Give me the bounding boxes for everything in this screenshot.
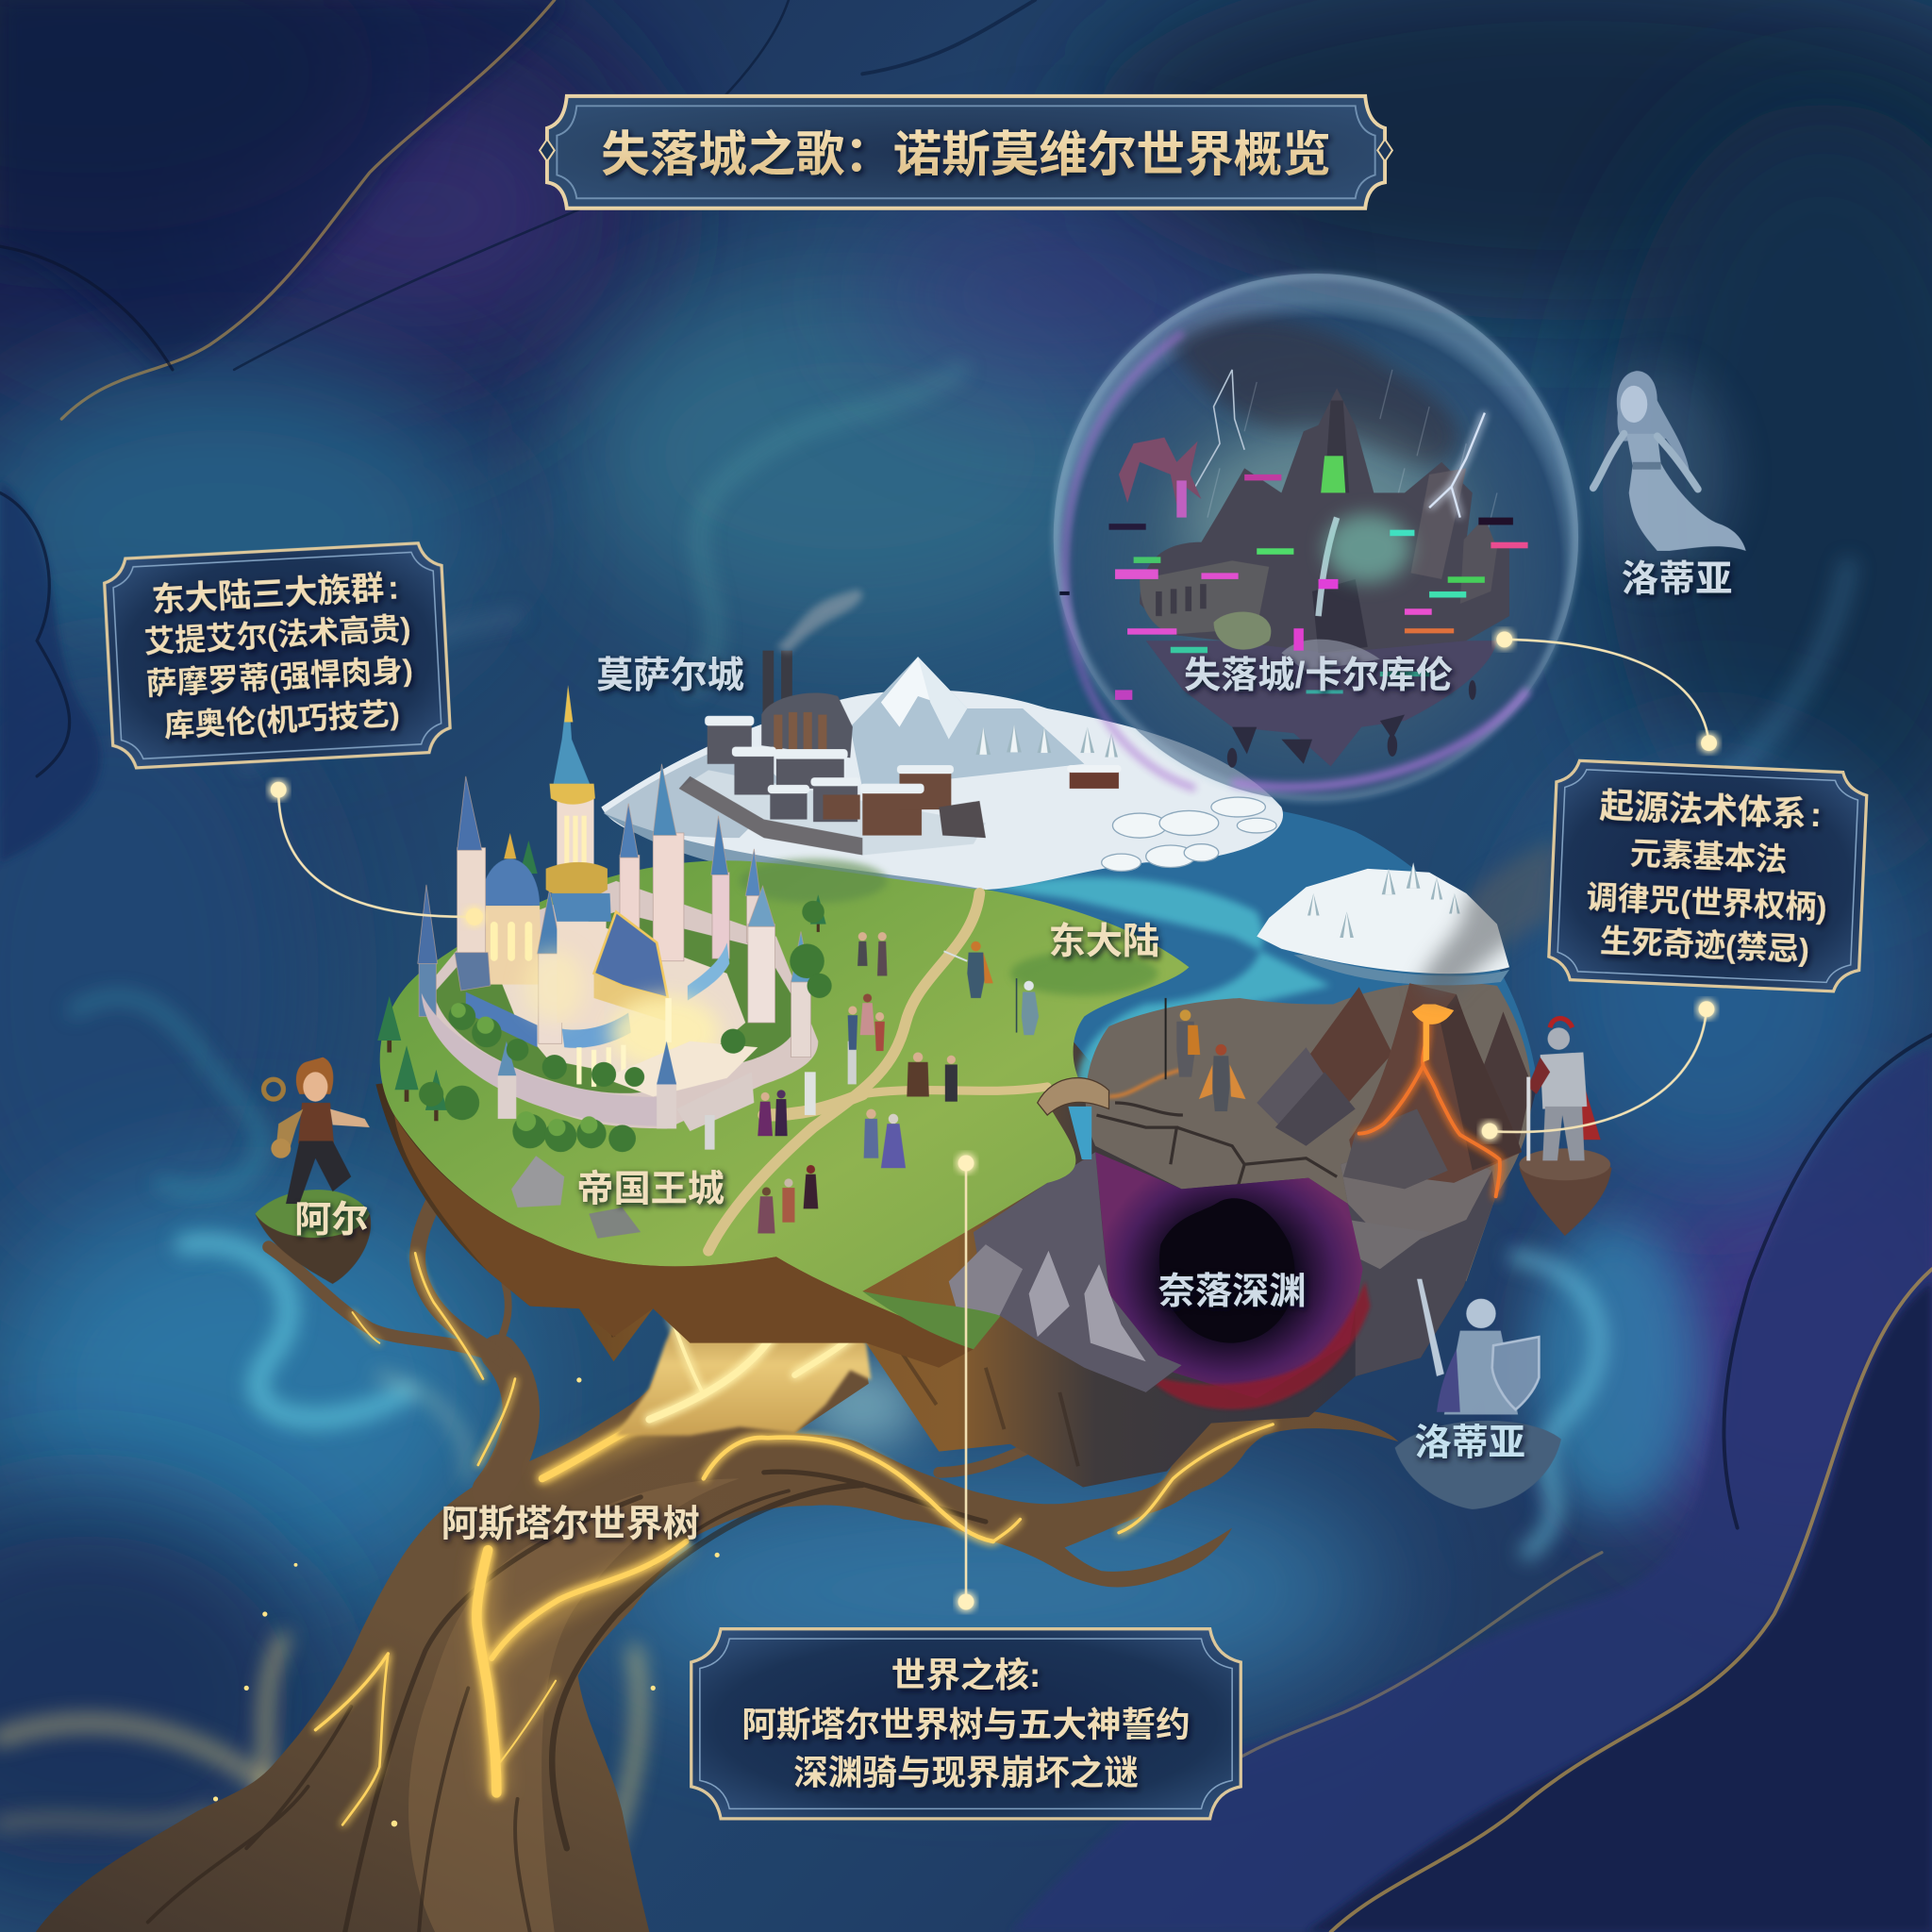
cathedral roof [594, 912, 668, 998]
magic text: 生死奇迹(禁忌) [1599, 924, 1810, 968]
clans text: 艾提艾尔(法术高贵) [143, 610, 411, 659]
earth edge [394, 1115, 974, 1368]
dome [480, 906, 542, 985]
magic text: 调律咒(世界权柄) [1586, 880, 1827, 925]
label: Lotia upper: 洛蒂亚 [1622, 559, 1732, 600]
clans text: 萨摩罗蒂(强悍肉身) [145, 652, 414, 701]
clans text [142, 569, 416, 744]
sea [887, 800, 1538, 1084]
courtyard [422, 881, 818, 1128]
label: world tree: 阿斯塔尔世界树 [441, 1505, 700, 1545]
hall roofs [466, 991, 537, 1047]
ghost figure: Lotia spirit [1583, 370, 1746, 579]
connector: magic callout to lost city [1496, 631, 1717, 751]
small figures on the continents [758, 932, 1245, 1233]
label: imperial capital: 帝国王城 [576, 1169, 724, 1209]
golden veins [315, 1253, 1273, 1824]
abyss cave [1095, 1152, 1363, 1398]
snow continent: north [601, 690, 1283, 890]
imperial capital castle [377, 685, 857, 1239]
label: Mosaer city: 莫萨尔城 [596, 656, 744, 696]
chimney smoke [776, 590, 862, 653]
mini island: Al [255, 1058, 371, 1284]
dress [1626, 434, 1746, 551]
core text: 深渊骑与现界崩坏之谜 [793, 1753, 1139, 1791]
floating rock [1146, 641, 1497, 766]
flowing hair [1617, 371, 1690, 478]
connector: magic callout to knight [1482, 1001, 1714, 1140]
lightning [1429, 413, 1485, 518]
mini island: knight [1519, 1019, 1611, 1236]
front wall [422, 993, 667, 1126]
shrubs [419, 901, 832, 1152]
data glitches [1059, 475, 1528, 700]
callout: three clans [103, 542, 451, 769]
right cliff [1341, 1140, 1496, 1376]
central hall [492, 918, 745, 1084]
magic text: 元素基本法 [1629, 837, 1788, 878]
golden lit roots [616, 1293, 871, 1436]
wyvern [1119, 438, 1201, 506]
title text: 失落城之歌：诺斯莫维尔世界概览 [601, 115, 1331, 186]
dirt road [708, 893, 1047, 1251]
main trunk and branches [36, 1337, 1398, 1932]
callout: world core [691, 1629, 1241, 1819]
light glow [610, 995, 721, 1070]
core text [741, 1656, 1191, 1791]
volcano smoke [1417, 838, 1558, 998]
core text: 世界之核: [891, 1656, 1041, 1694]
magic text [1584, 786, 1832, 969]
map labels [294, 559, 1732, 1545]
clans text: 东大陆三大族群: [151, 569, 400, 619]
sealed sphere: lost city [1054, 274, 1578, 801]
label: Naraku abyss: 奈落深渊 [1158, 1272, 1306, 1312]
world tree: Astar [36, 1201, 1398, 1932]
volcano and mountains [1257, 838, 1558, 1196]
core text: 阿斯塔尔世界树与五大神誓约 [741, 1705, 1191, 1743]
character: armored knight [1526, 1019, 1601, 1160]
title banner [540, 96, 1392, 208]
magic text: 起源法术体系: [1599, 786, 1823, 834]
grey rocks [974, 1152, 1182, 1392]
green continent [380, 860, 1189, 1349]
clans text: 库奥伦(机巧技艺) [163, 696, 401, 743]
label: lost city: 失落城/卡尔库伦 [1184, 656, 1453, 696]
rain [1208, 370, 1497, 542]
label: Lotia lower: 洛蒂亚 [1414, 1424, 1525, 1464]
mini island: Lotia knight spirit [1395, 1279, 1561, 1509]
plateau [1086, 982, 1531, 1281]
towers [418, 764, 810, 1058]
island underside rock [375, 937, 1538, 1487]
label: east continent: 东大陆 [1049, 922, 1159, 962]
callout: origin magic [1548, 759, 1868, 992]
ruined castle [1140, 388, 1509, 653]
bridge [1038, 1078, 1109, 1115]
vein halo [483, 1375, 794, 1792]
floating world island [375, 690, 1538, 1487]
label: Al: 阿尔 [294, 1200, 369, 1241]
small snow island [1257, 869, 1509, 974]
main keep [557, 798, 594, 882]
character: Al [264, 1058, 370, 1204]
Mosaer city: snow factories [679, 590, 1122, 855]
character: ghost knight [1417, 1279, 1539, 1414]
connector: world core to island [958, 1155, 974, 1609]
connector: clans callout to capital [271, 782, 483, 925]
